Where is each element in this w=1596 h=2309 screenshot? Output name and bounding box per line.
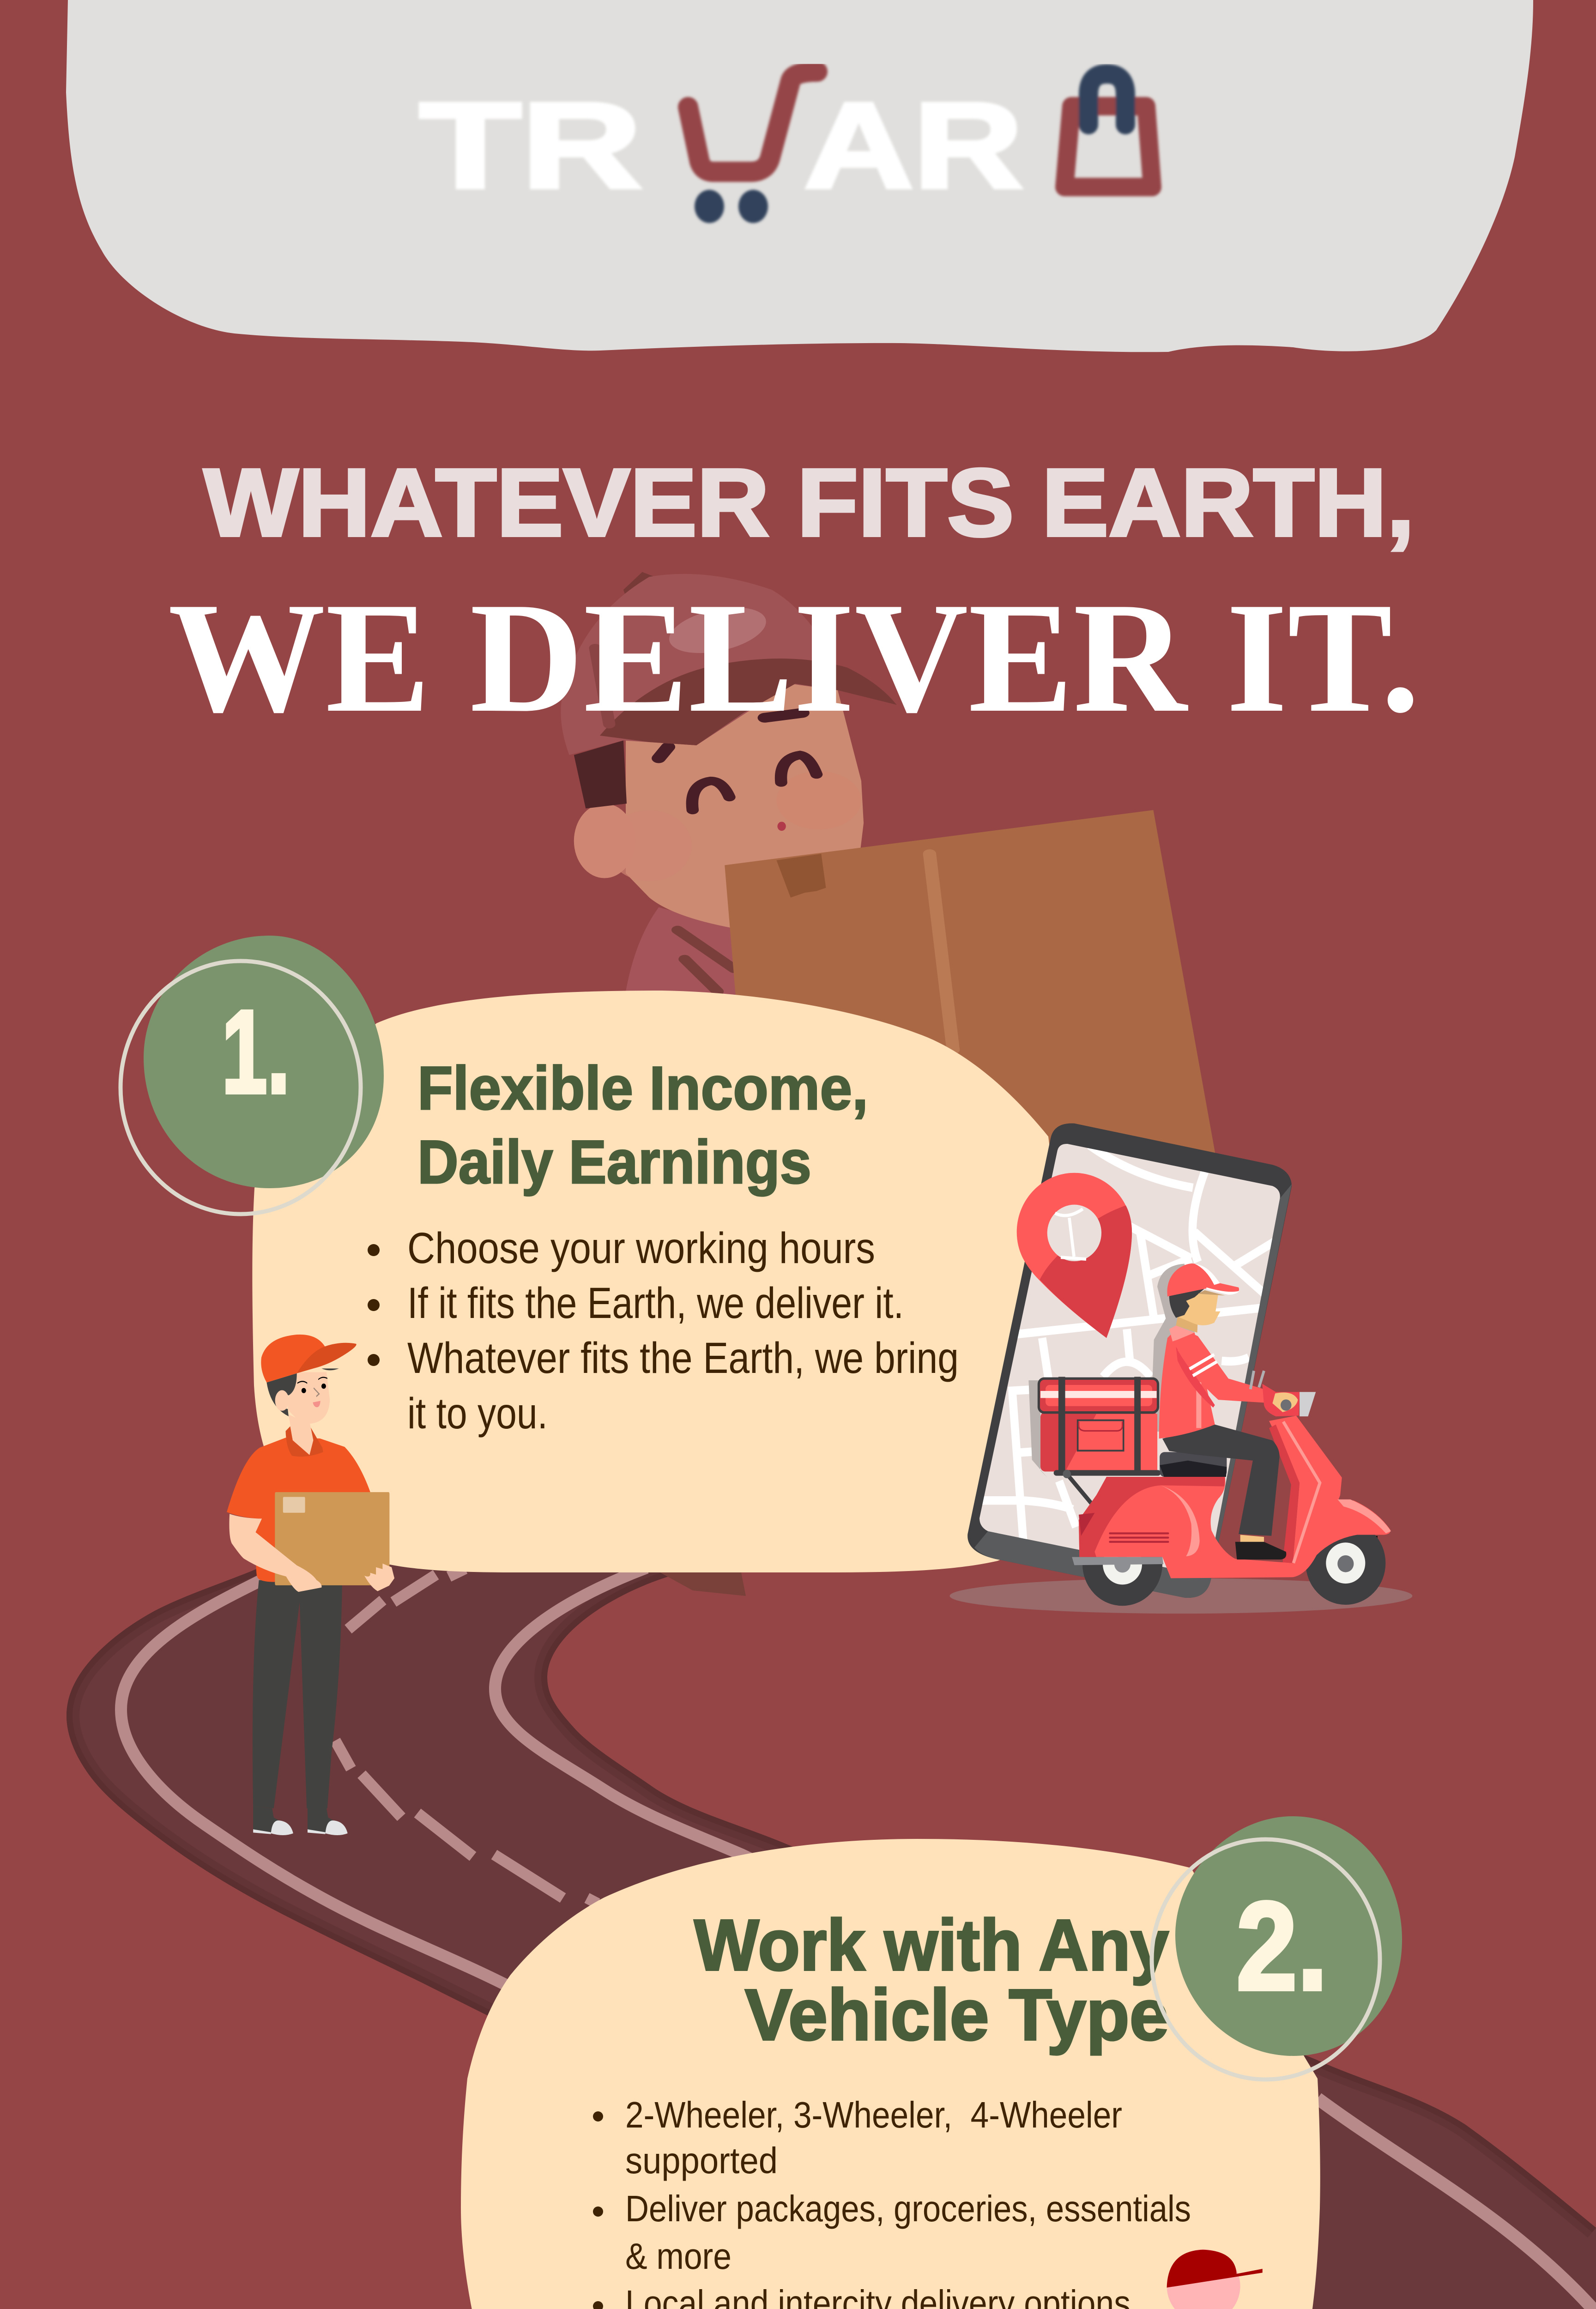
- man shirt: [227, 1427, 370, 1582]
- bullet list 1: it to you.: [407, 1389, 548, 1438]
- handlebar and hand: [1251, 1371, 1316, 1416]
- character face: [574, 684, 864, 928]
- illustration: delivery man holding box: [227, 1335, 394, 1835]
- bullet list 2: [593, 2094, 1191, 2309]
- man shoes: [253, 1807, 348, 1835]
- number badge 2: 2.: [1236, 1876, 1328, 2016]
- panel: any vehicle type: [461, 1816, 1402, 2309]
- bullet list 2: Deliver packages, groceries, essentials: [625, 2188, 1191, 2229]
- character cap: [561, 572, 897, 755]
- bullet list 2: 2-Wheeler, 3-Wheeler, 4-Wheeler: [625, 2094, 1122, 2135]
- rider legs and seat: [1160, 1425, 1286, 1559]
- heading 2: [694, 1905, 1169, 2055]
- ground shadow: [949, 1578, 1412, 1614]
- panel: top logo band: [66, 0, 1533, 352]
- logo: [419, 72, 1152, 223]
- logo: TR: [419, 77, 642, 213]
- title line 2: WE DELIVER IT.: [168, 570, 1420, 745]
- rear wheel: [1082, 1523, 1162, 1606]
- number badge 1: 1.: [222, 986, 290, 1118]
- front wheel: [1306, 1521, 1385, 1605]
- man trousers: [253, 1580, 342, 1808]
- scooter body: [1072, 1416, 1391, 1578]
- title: [168, 449, 1420, 745]
- illustration: flat scooter rider with speed lines: [802, 2249, 1435, 2309]
- panel 2 cream blob: [461, 1839, 1320, 2309]
- box shadow stub under panel: [656, 1570, 746, 1596]
- panel 1 cream blob: [252, 991, 1062, 1572]
- bullet list 2: supported: [625, 2140, 778, 2181]
- character shirt: [626, 907, 791, 1040]
- man head: [266, 1368, 339, 1455]
- map pin: [1017, 1173, 1132, 1338]
- rider head and cap: [1167, 1263, 1239, 1333]
- rider torso and arm: [1159, 1325, 1276, 1439]
- bullet list 1: [368, 1224, 959, 1438]
- title line 1: WHATEVER FITS EARTH,: [204, 449, 1415, 556]
- man arm and hands: [229, 1514, 394, 1592]
- bullet list 1: If it fits the Earth, we deliver it.: [407, 1279, 904, 1328]
- bullet list 1: Whatever fits the Earth, we bring: [407, 1334, 959, 1383]
- road edge lines and centre dashes: [121, 1568, 1596, 2309]
- heading 2: Work with Any: [694, 1905, 1169, 1986]
- rider head: [1167, 2249, 1263, 2309]
- heading 1: Flexible Income,: [417, 1054, 868, 1123]
- number badge 2: [1152, 1816, 1402, 2079]
- character cardboard box: [725, 810, 1224, 1202]
- man cap: [261, 1335, 357, 1383]
- bullet list 2: & more: [625, 2236, 732, 2277]
- header shape: [66, 0, 1533, 352]
- delivery box on scooter: [1039, 1377, 1158, 1519]
- number badge 1: [121, 936, 384, 1214]
- faded delivery character behind title: [561, 572, 1224, 1202]
- road surface: [66, 1547, 1596, 2309]
- heading 1: [417, 1054, 868, 1197]
- heading 2: Vehicle Type: [745, 1975, 1169, 2055]
- rider shadow on phone: [1028, 1263, 1195, 1477]
- man carton: [275, 1492, 389, 1585]
- heading 1: Daily Earnings: [417, 1128, 811, 1197]
- panel: flexible income: [121, 936, 1062, 1572]
- illustration: phone map with scooter rider: [949, 1124, 1412, 1614]
- phone body: [967, 1124, 1292, 1598]
- bullet list 1: Choose your working hours: [407, 1224, 875, 1273]
- logo: AR: [804, 77, 1023, 213]
- winding road: [66, 1547, 1596, 2309]
